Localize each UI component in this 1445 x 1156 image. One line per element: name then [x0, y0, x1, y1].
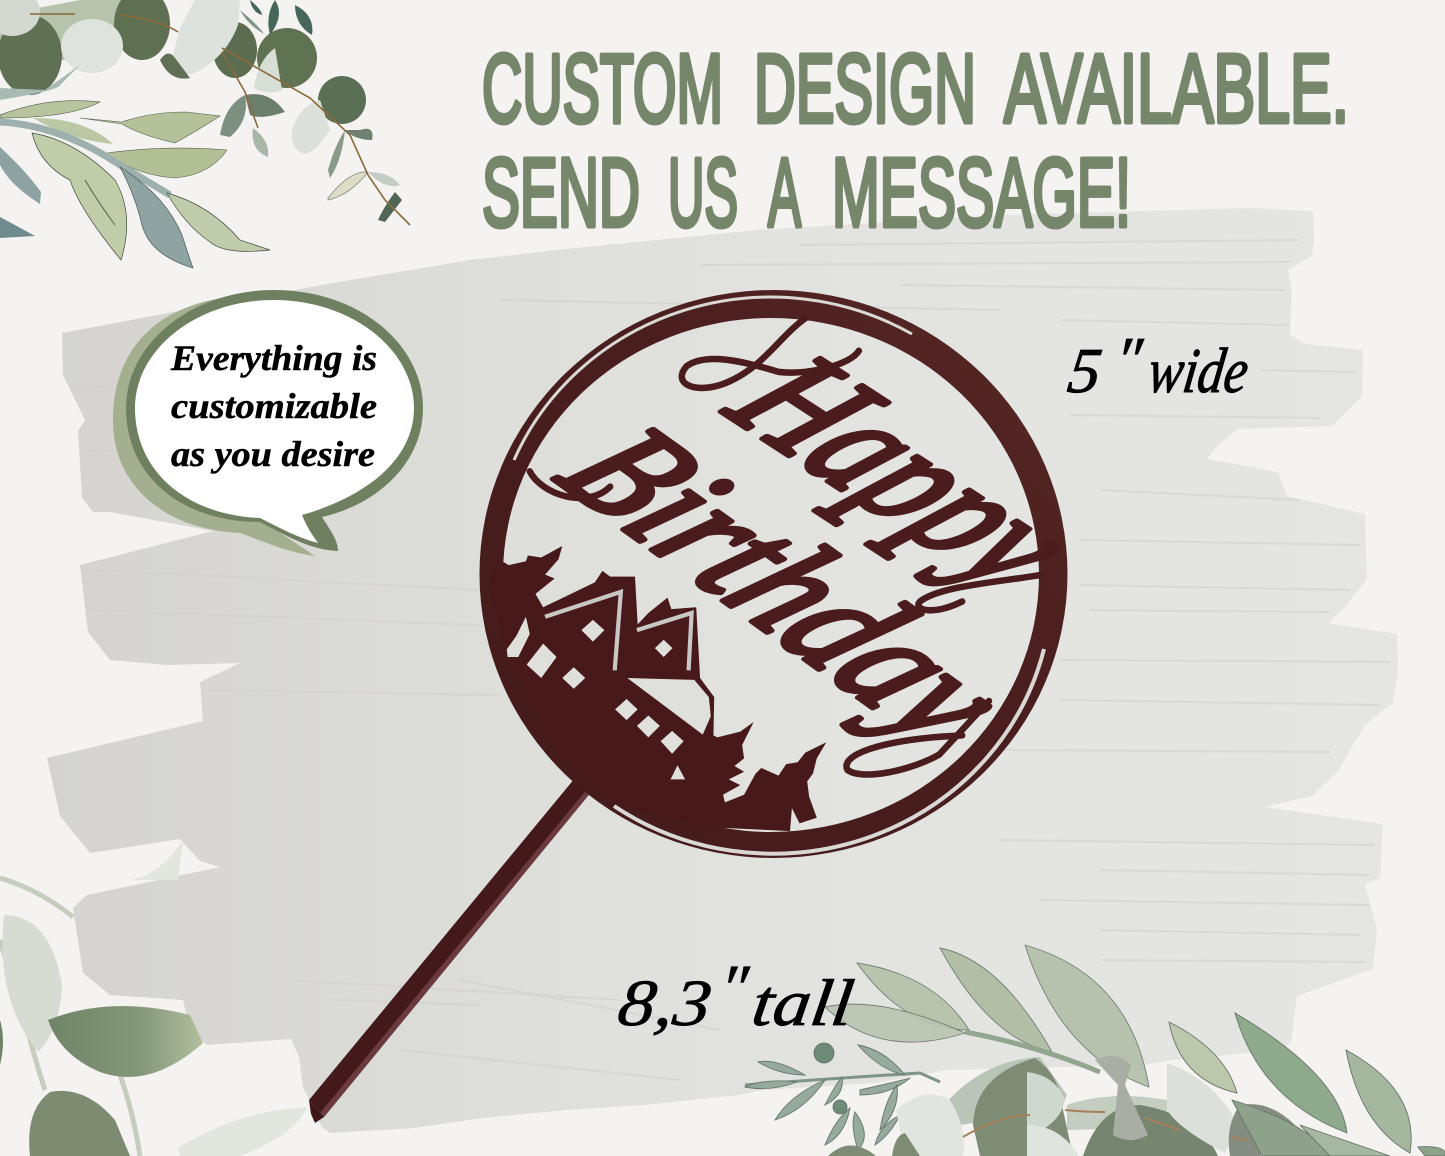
bubble shadow: [113, 296, 315, 556]
cake topper: [309, 290, 1117, 1123]
happy birthday lettering: Happy: [692, 328, 1117, 612]
label: width: ": [1110, 324, 1147, 395]
bubble outline: [126, 290, 423, 551]
foliage: bottom left: [0, 840, 307, 1156]
label: width: [1064, 324, 1253, 406]
bubble text: [170, 338, 377, 474]
title: A: [768, 138, 801, 247]
foliage: bottom right: [745, 945, 1445, 1156]
bubble text: as you desire: [171, 434, 375, 474]
foliage: top left: [0, 0, 410, 268]
bubble text: Everything is: [170, 338, 377, 378]
lettering flourishes: [530, 318, 1043, 775]
title: SEND: [482, 138, 640, 247]
ring slits: [514, 297, 1044, 854]
topper stick: [309, 778, 592, 1123]
label: width: wide: [1144, 335, 1253, 406]
label: height: 8,3: [614, 967, 716, 1040]
bubble fill: [135, 300, 414, 543]
label: height: [614, 952, 858, 1040]
title: MESSAGE!: [832, 138, 1131, 247]
brush stroke wood panel: [47, 208, 1398, 1133]
houses and trees scene: [488, 546, 826, 831]
title: [482, 34, 1349, 247]
happy birthday lettering: Birthday: [522, 401, 1050, 766]
label: height: tall: [748, 967, 858, 1040]
speech bubble: [113, 290, 423, 556]
topper ring: [480, 290, 1068, 858]
bubble text: customizable: [171, 386, 377, 426]
title: DESIGN: [754, 34, 976, 143]
label: width: 5: [1064, 335, 1106, 406]
title: US: [668, 138, 738, 247]
title: CUSTOM: [482, 34, 723, 143]
label: height: ": [714, 952, 753, 1025]
